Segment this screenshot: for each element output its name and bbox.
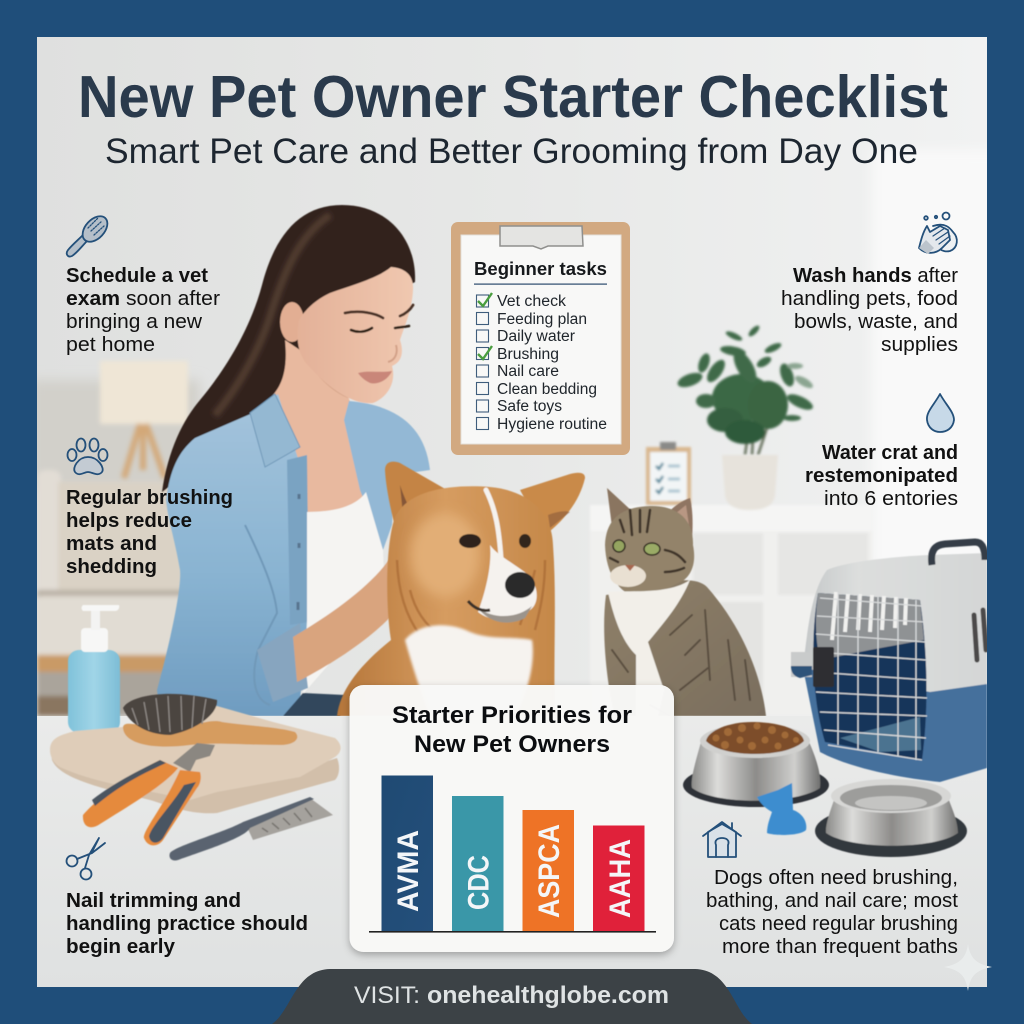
lips [358, 371, 392, 383]
clipboard clip [500, 226, 583, 249]
chart title: Starter Priorities for [392, 702, 632, 729]
dog left ear [385, 462, 447, 540]
text: dogs and cats care: cats need regular brushing [719, 913, 958, 935]
text: wash hands: bowls, waste, and [794, 311, 958, 333]
text: brushing: mats and [66, 533, 157, 555]
bar: AVMA [382, 776, 433, 932]
nail clippers [83, 743, 215, 845]
bar: ASPCA [522, 810, 574, 932]
task list: Nail care [497, 363, 559, 380]
text: water: into 6 entories [824, 488, 958, 510]
task list: Brushing [497, 346, 559, 363]
carrier door [813, 592, 927, 760]
sofa [37, 470, 193, 716]
text: nail trimming [66, 890, 308, 958]
task list: Daily water [497, 328, 575, 345]
icon: water drop [927, 394, 954, 432]
icon: brush [67, 212, 112, 257]
subtitle: Smart Pet Care and Better Grooming from Day One [105, 132, 918, 171]
sleeve fold [245, 525, 277, 705]
dog right ear [520, 473, 585, 535]
footer banner: VISIT: [354, 982, 420, 1009]
footer banner [272, 969, 752, 1024]
text: vet exam: pet home [66, 334, 155, 356]
task list: Vet check [497, 293, 566, 310]
footer banner: onehealthglobe.com [427, 982, 669, 1009]
text: vet exam: Schedule a vet [66, 265, 208, 287]
text: vet exam: exam soon after [66, 288, 220, 310]
chart title: New Pet Owners [414, 731, 610, 758]
text: brushing: helps reduce [66, 510, 192, 532]
task list [476, 293, 607, 433]
cabinet [590, 506, 868, 688]
eyebrows [345, 305, 413, 318]
dog head and body [337, 486, 555, 716]
blurred room scene [30, 150, 1002, 716]
bristle brush [123, 694, 297, 747]
cat body [604, 580, 766, 716]
bar: ASPCA: ASPCA [533, 824, 566, 918]
icon: paw [68, 438, 108, 474]
text: nail trimming: handling practice should [66, 913, 308, 935]
ear [280, 302, 304, 342]
metal comb [169, 797, 333, 861]
woman [157, 205, 430, 716]
carrier side clip [791, 652, 812, 677]
lamp [100, 361, 188, 478]
wall shadow [30, 380, 200, 490]
shirt right side [344, 401, 430, 550]
table [37, 716, 987, 987]
carrier vent slots [974, 610, 986, 660]
bar: AVMA: AVMA [392, 830, 425, 912]
title: New Pet Owner Starter Checklist [78, 64, 948, 130]
bar: CDC: CDC [462, 855, 496, 910]
carrier blue base [803, 668, 987, 782]
dog fur strands [397, 560, 545, 635]
shirt buttons [298, 494, 299, 610]
text: water: restemonipated [805, 465, 958, 487]
text: wash hands: Wash hands after [793, 265, 958, 287]
text: dogs and cats care: Dogs often need brushing, [714, 867, 958, 889]
sparkle decoration [944, 944, 992, 991]
bar: CDC [452, 796, 504, 932]
task list: Feeding plan [497, 311, 587, 328]
food bowl [683, 722, 829, 807]
eyes [351, 326, 409, 332]
plant [676, 324, 815, 510]
text: dogs and cats care [706, 867, 958, 958]
clipboard [451, 222, 630, 455]
face [297, 267, 413, 403]
text: vet exam: bringing a new [66, 311, 203, 333]
cat white chest [608, 580, 690, 716]
dog blaze [486, 490, 501, 558]
text: wash hands: supplies [881, 334, 958, 356]
carrier handle [932, 542, 985, 565]
cat left ear [607, 488, 633, 527]
text: brushing: Regular brushing [66, 487, 233, 509]
rolled sleeve [257, 623, 308, 702]
bowls and food [683, 722, 967, 857]
shirt collar [250, 394, 300, 467]
task list: Safe toys [497, 398, 562, 415]
chart title [392, 702, 632, 758]
jeans [283, 693, 345, 716]
white tank top [303, 492, 385, 694]
dog muzzle [478, 545, 537, 619]
cat right ear [662, 498, 693, 540]
carrier grey top shell [803, 553, 987, 692]
blue waste bag [757, 783, 806, 835]
bar: AAHA [593, 826, 644, 932]
text: water [805, 442, 958, 510]
bar: AAHA: AAHA [604, 839, 637, 918]
clipboard paper [461, 235, 621, 444]
cat eyes [613, 540, 625, 552]
task list: Hygiene routine [497, 416, 607, 433]
chart card: starter priorities [350, 685, 674, 952]
text: dogs and cats care: bathing, and nail care; most [706, 890, 958, 912]
carrier door latch [813, 647, 834, 687]
dog nose [505, 572, 535, 598]
text: wash hands: handling pets, food [781, 288, 958, 310]
cat [604, 488, 766, 716]
icon: scissors [66, 838, 105, 880]
cat white muzzle [610, 565, 646, 587]
shampoo bottle [68, 605, 120, 733]
text: brushing [66, 487, 233, 578]
cat nose [625, 565, 635, 571]
shirt placket [287, 455, 309, 625]
text: brushing: shedding [66, 556, 157, 578]
neck and chest [272, 340, 368, 512]
dog [337, 462, 585, 716]
text: nail trimming: begin early [66, 936, 176, 958]
text: dogs and cats care: more than frequent baths [722, 936, 958, 958]
dog eyes [459, 534, 481, 548]
grooming items [50, 605, 341, 861]
pet carrier [791, 542, 987, 782]
nose shade [388, 345, 397, 362]
task list: Clean bedding [497, 381, 597, 398]
hair [162, 205, 415, 492]
shirt torso and sleeve [157, 394, 308, 716]
water bowl [815, 779, 967, 857]
dog chest [405, 625, 533, 716]
text: nail trimming: Nail trimming and [66, 890, 241, 912]
icon: hand washing [919, 212, 957, 254]
text: water: Water crat and [822, 442, 958, 464]
text: wash hands [781, 265, 958, 356]
folded towels [50, 706, 341, 813]
text: vet exam [66, 265, 220, 356]
dog mouth [468, 601, 490, 611]
clipboard heading: Beginner tasks [474, 259, 607, 279]
curtain [876, 154, 986, 558]
cat head [605, 506, 694, 598]
small wall clipboard [646, 442, 691, 505]
clipboard board [451, 222, 630, 455]
icon: house [703, 822, 741, 857]
forearm [293, 545, 420, 682]
cat stripes [610, 510, 685, 572]
